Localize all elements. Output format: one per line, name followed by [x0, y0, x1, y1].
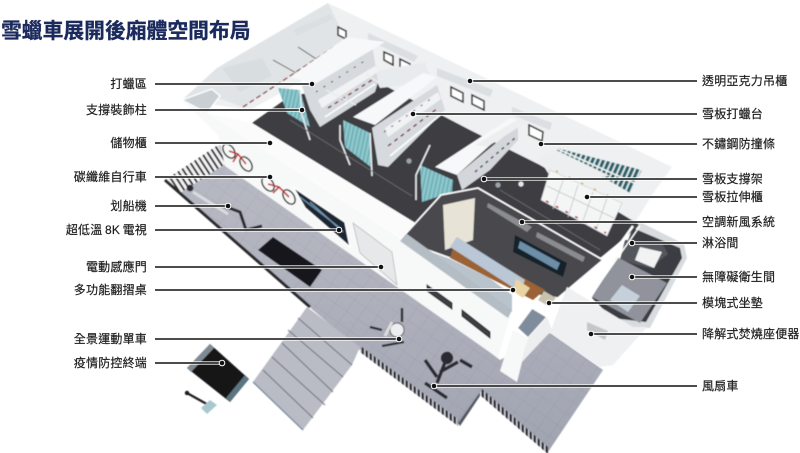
callout: 空調新風系統 — [519, 214, 775, 229]
callout: 降解式焚燒座便器 — [588, 326, 800, 341]
wall windows — [427, 285, 490, 338]
callout: 碳纖維自行車 — [74, 170, 273, 184]
locker cabinet — [538, 150, 622, 236]
callout: 風扇車 — [431, 379, 739, 393]
callout: 淋浴間 — [629, 236, 739, 250]
roof and back wall — [182, 3, 672, 224]
end wall panel — [222, 58, 272, 92]
callout: 划船機 — [110, 198, 231, 213]
gym floor — [165, 145, 603, 452]
callout: 模塊式坐墊: 模塊式坐墊 — [702, 295, 763, 310]
lounge room — [400, 188, 603, 318]
callout: 空調新風系統: 空調新風系統 — [702, 214, 775, 229]
cutaway of the vehicle — [165, 3, 687, 453]
floor side edge — [165, 180, 310, 307]
rowing machine — [187, 185, 262, 230]
callout: 雪板拉伸櫃: 雪板拉伸櫃 — [702, 189, 763, 204]
stairs — [253, 307, 360, 430]
sensor door — [353, 223, 397, 285]
ski rack — [556, 148, 642, 193]
callout: 不鏽鋼防撞條: 不鏽鋼防撞條 — [702, 136, 775, 151]
callout: 雪板打蠟台: 雪板打蠟台 — [702, 106, 763, 121]
title: 雪蠟車展開後廂體空間布局 — [1, 19, 251, 43]
floor lights and seams — [290, 120, 600, 250]
callout: 碳纖維自行車: 碳纖維自行車 — [74, 170, 147, 184]
hollow white box — [500, 308, 552, 382]
callout: 支撐裝飾柱 — [86, 102, 305, 117]
support posts — [300, 90, 430, 200]
right white block — [550, 287, 647, 367]
wall between units — [372, 62, 432, 88]
inner wall strip — [405, 224, 512, 312]
callout: 全景運動單車 — [74, 331, 402, 346]
callout: 風扇車: 風扇車 — [702, 379, 739, 393]
epidemic terminal — [187, 344, 249, 402]
callout: 儲物櫃: 儲物櫃 — [110, 136, 147, 150]
wax unit 3 — [435, 118, 527, 190]
dark floor — [252, 82, 640, 298]
main white wall — [182, 100, 512, 358]
wax stripe on wall — [243, 45, 337, 107]
callout: 打蠟區 — [110, 77, 315, 91]
back wall windows — [338, 27, 543, 141]
hanging cabinets — [293, 14, 552, 130]
blue curtains — [278, 88, 453, 202]
bathrooms — [587, 222, 687, 328]
callout: 透明亞克力吊櫃 — [467, 74, 787, 88]
callout: 划船機: 划船機 — [110, 198, 147, 213]
callout: 疫情防控終端 — [74, 355, 225, 370]
wax unit 2 — [353, 73, 445, 167]
callout: 雪板打蠟台 — [410, 106, 763, 121]
toilet panel — [587, 322, 608, 340]
callout: 多功能翻摺桌: 多功能翻摺桌 — [74, 282, 147, 297]
callout: 降解式焚燒座便器: 降解式焚燒座便器 — [702, 326, 800, 341]
callout: 電動感應門 — [86, 259, 384, 274]
callout: 電動感應門: 電動感應門 — [86, 259, 147, 274]
callout: 打蠟區: 打蠟區 — [110, 77, 147, 91]
callout: 淋浴間: 淋浴間 — [702, 236, 739, 250]
callout: 支撐裝飾柱: 支撐裝飾柱 — [86, 102, 147, 117]
deck side — [458, 392, 480, 426]
callout: 多功能翻摺桌 — [74, 282, 516, 297]
callout: 儲物櫃 — [110, 136, 273, 150]
floor shading — [165, 145, 603, 452]
upper end wall — [182, 3, 345, 107]
callout: 全景運動單車: 全景運動單車 — [74, 331, 147, 346]
wax unit 1 — [290, 37, 385, 127]
callout: 透明亞克力吊櫃: 透明亞克力吊櫃 — [702, 74, 787, 88]
callout: 雪板支撐架 — [481, 172, 763, 186]
back railing — [165, 145, 227, 193]
end box — [182, 89, 220, 113]
callout: 模塊式坐墊 — [546, 295, 763, 310]
small pole with base — [185, 391, 217, 414]
folding mat — [258, 237, 322, 287]
callout: 無障礙衛生間: 無障礙衛生間 — [702, 269, 775, 284]
wall top band — [207, 113, 417, 240]
callout: 不鏽鋼防撞條 — [538, 136, 775, 151]
callout: 超低溫8K電視 — [66, 222, 342, 237]
lower railings — [360, 347, 548, 453]
callout: 無障礙衛生間 — [629, 269, 775, 284]
panoramic exercise bike — [370, 308, 404, 346]
callout: 雪板支撐架: 雪板支撐架 — [702, 172, 763, 186]
callout: 雪板拉伸櫃 — [584, 189, 763, 204]
wall TV — [293, 187, 350, 247]
callout: 疫情防控終端: 疫情防控終端 — [74, 355, 147, 370]
fan bike — [425, 352, 472, 398]
callout: 超低溫8K電視: 超低溫 8K 電視 — [66, 222, 147, 237]
carbon bikes — [220, 142, 298, 206]
wall mounted rail — [273, 47, 330, 74]
